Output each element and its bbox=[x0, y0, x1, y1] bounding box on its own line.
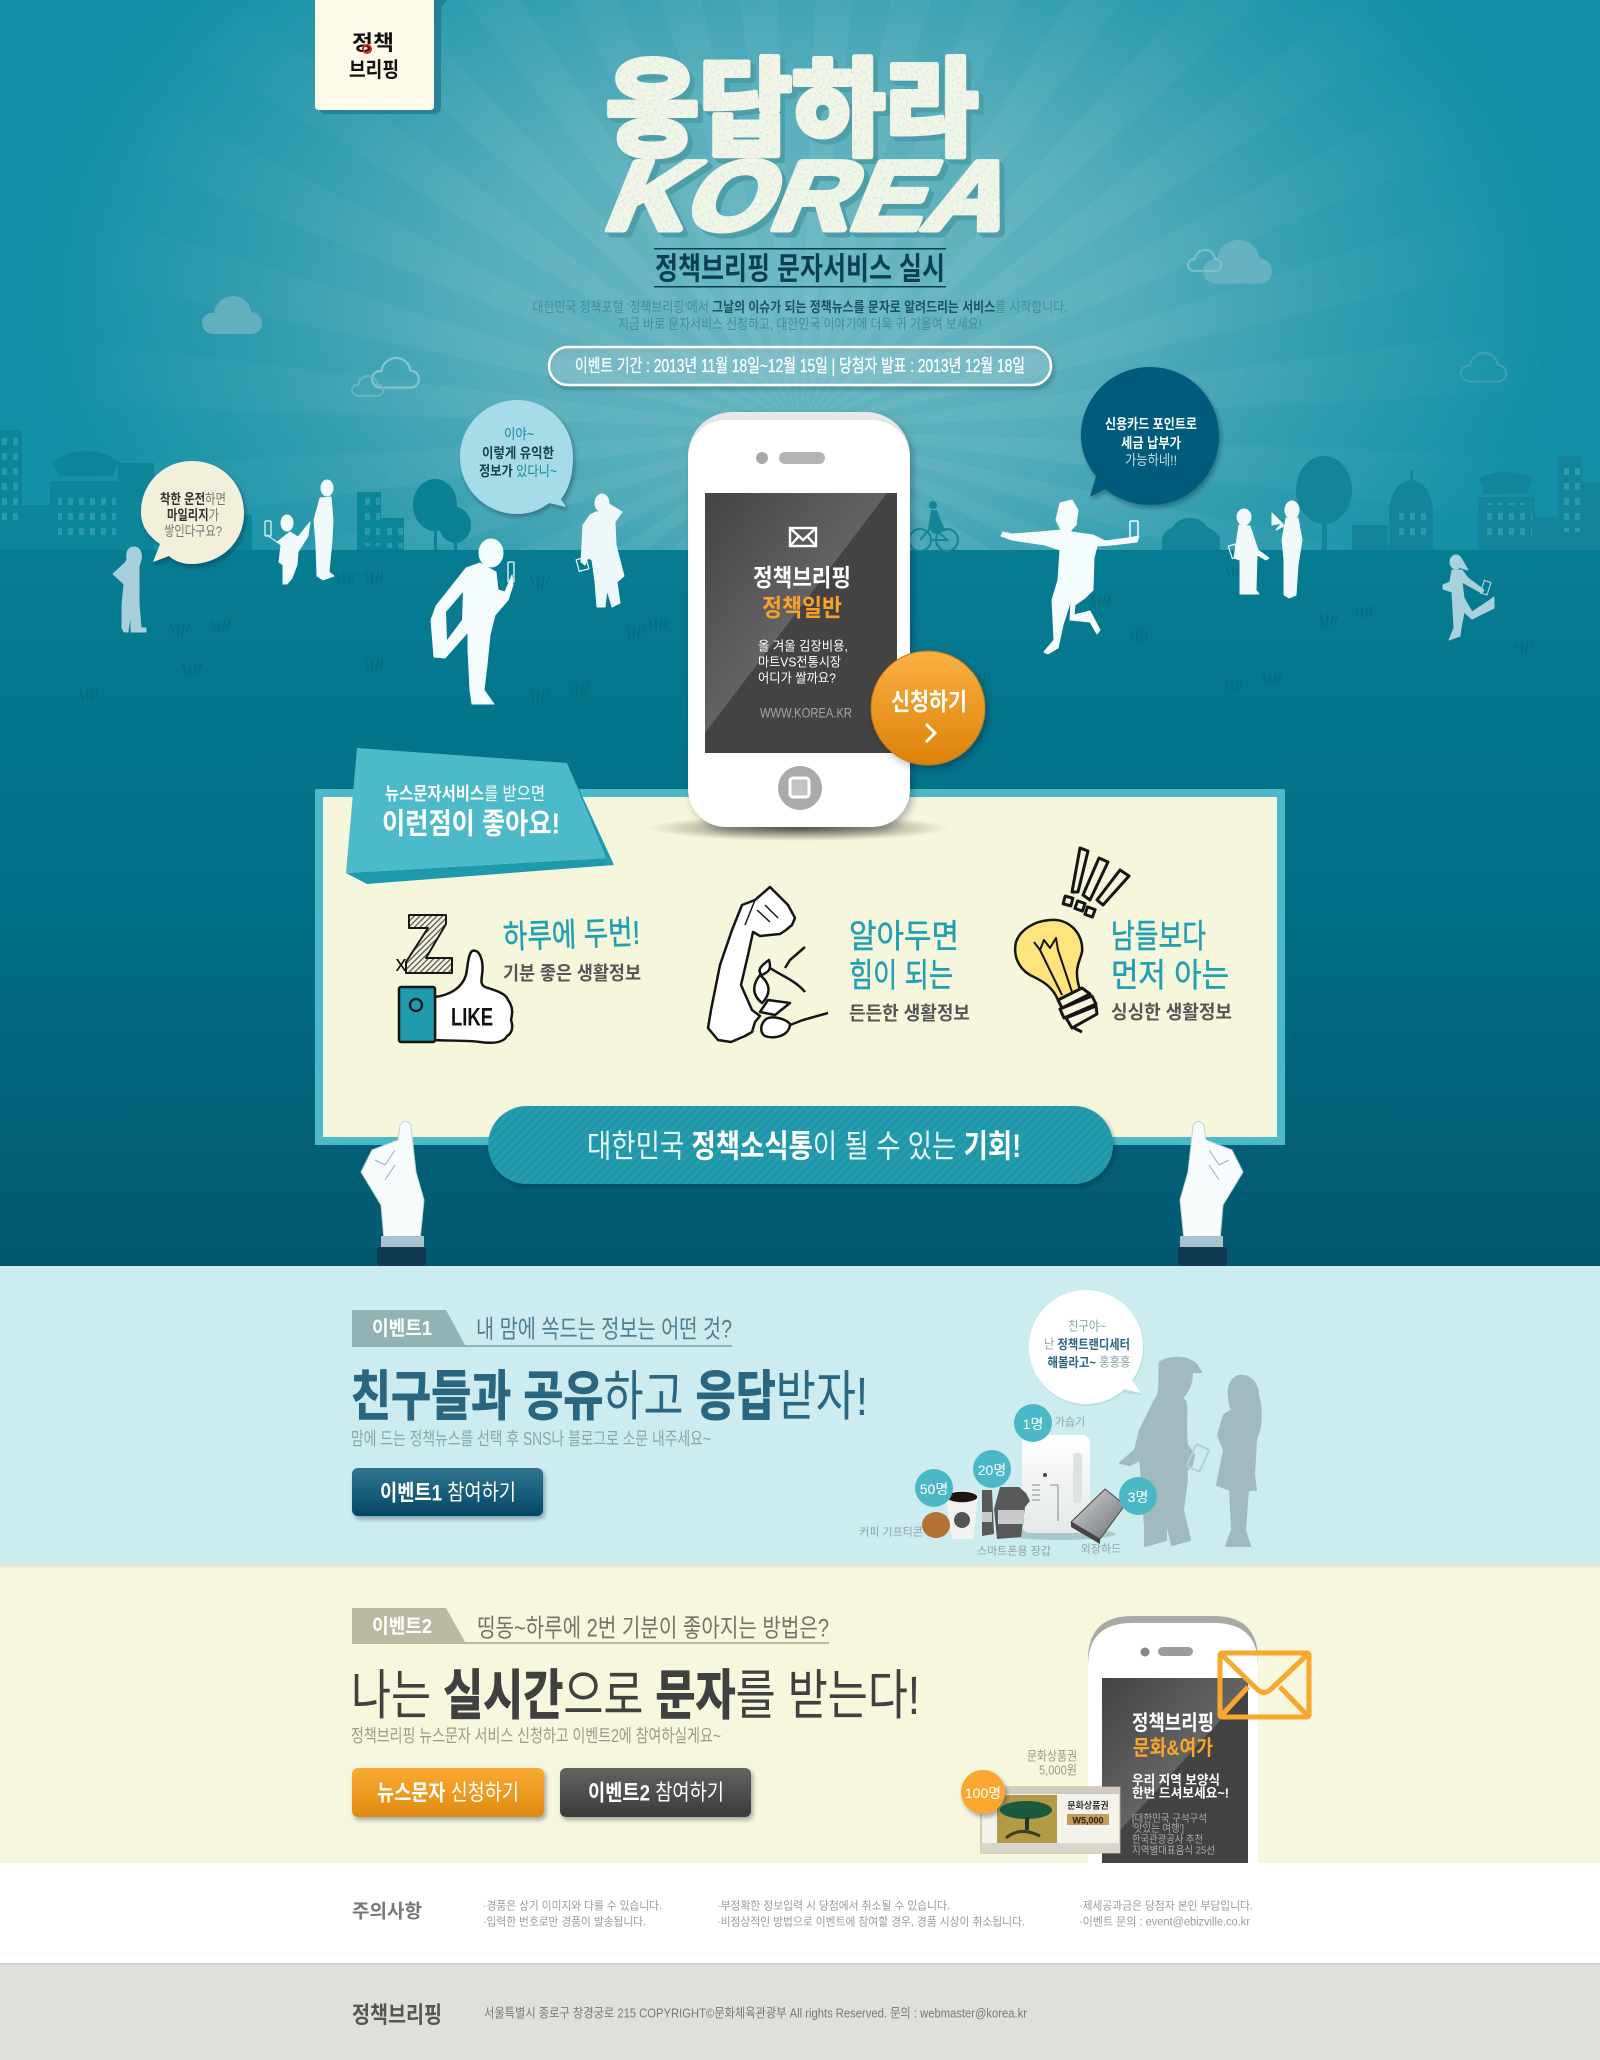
benefit 3 text: 남들보다 bbox=[1111, 917, 1206, 954]
prize: gift voucher: W5,000 bbox=[1072, 1816, 1104, 1826]
phone screen: 정책브리핑 bbox=[753, 565, 851, 592]
event 2 heading: 나는 실시간으로 문자를 받는다! bbox=[351, 1666, 920, 1726]
speech bubble: friend: 난 정책트랜디세터 bbox=[1044, 1336, 1130, 1351]
speech bubble: dark blue: 가능하네!! bbox=[1125, 452, 1177, 468]
event 1 tag: 내 맘에 쏙드는 정보는 어떤 것? bbox=[476, 1316, 732, 1344]
footer copyright: 서울특별시 종로구 창경궁로 215 COPYRIGHT©문화체육관광부 All rights Reserved. 문의 : webmaster@korea.kr bbox=[484, 2005, 1028, 2020]
phone screen: 올 겨울 김장비용, bbox=[758, 638, 848, 653]
footer logo: 정책브리핑 bbox=[352, 2001, 442, 2027]
event 1 button bbox=[352, 1468, 543, 1516]
event 1 button: 이벤트1 참여하기 bbox=[380, 1480, 516, 1505]
slogan pill bbox=[488, 1106, 1113, 1184]
prize labels bbox=[859, 1416, 1121, 1558]
logo card: 정책 bbox=[352, 32, 394, 55]
notice lines: ·이벤트 문의 : event@ebizville.co.kr bbox=[1079, 1916, 1250, 1929]
silhouette: big person right bbox=[1001, 500, 1139, 654]
speech bubble: light blue: 이야~ bbox=[504, 426, 534, 442]
subtitle: 정책브리핑 문자서비스 실시 bbox=[655, 251, 945, 286]
prize labels: 스마트폰용 장갑 bbox=[977, 1545, 1051, 1558]
event period pill: 이벤트 기간 : 2013년 11월 18일~12월 15일 | 당첨자 발표 : 2013년 12월 18일 bbox=[575, 356, 1025, 376]
speech bubble: cream: 착한 운전하면 bbox=[160, 491, 226, 507]
apply button: 신청하기 bbox=[891, 689, 967, 716]
silhouette: boy left bbox=[113, 547, 146, 632]
benefit 1 text: 하루에 두번! bbox=[502, 914, 641, 955]
phone screen: 마트VS전통시장 bbox=[758, 654, 841, 669]
clouds bbox=[202, 240, 1506, 396]
icon: light bulb and exclamation marks bbox=[1015, 848, 1129, 1032]
speech bubble: dark blue: 신용카드 포인트로 bbox=[1105, 416, 1197, 432]
phone 2: '맛있는 여행'] bbox=[1132, 1823, 1184, 1835]
benefit 1 text bbox=[502, 914, 641, 985]
prize labels: 커피 기프티콘 bbox=[859, 1526, 923, 1539]
silhouette: boy and girl bbox=[1120, 1358, 1261, 1546]
benefits tag: 뉴스문자서비스를 받으면 bbox=[385, 784, 545, 804]
button: event 2 join: 이벤트2 참여하기 bbox=[588, 1780, 724, 1805]
silhouette: man with tablet bbox=[576, 494, 624, 607]
icon: like thumb with Z: LIKE bbox=[451, 1004, 493, 1032]
prize label: gift card: 문화상품권 bbox=[1027, 1748, 1077, 1763]
speech bubble: dark blue: 세금 납부가 bbox=[1121, 435, 1181, 451]
logo card: 브리핑 bbox=[349, 59, 399, 82]
button: event 2 join bbox=[560, 1768, 751, 1817]
phone screen: WWW.KOREA.KR bbox=[760, 705, 852, 720]
speech bubble: light blue bbox=[460, 400, 573, 514]
icon: like thumb with Z bbox=[396, 915, 512, 1043]
phone screen bbox=[705, 493, 897, 753]
silhouette: couple right bbox=[1228, 501, 1302, 598]
notice lines: ·경품은 상기 이미지와 다를 수 있습니다. bbox=[483, 1899, 662, 1913]
panel: event 2 bbox=[0, 1565, 1600, 1863]
phone screen: 어디가 쌀까요? bbox=[758, 670, 836, 685]
speech bubble: cream: 마일리지가 bbox=[167, 507, 219, 523]
event 1 tag: 이벤트1 bbox=[372, 1317, 432, 1340]
city skyline left bbox=[0, 430, 471, 550]
event period pill bbox=[549, 347, 1051, 385]
prize count badges: 1명 bbox=[1023, 1416, 1043, 1432]
intro text bbox=[532, 299, 1068, 332]
phone 2: 지역별대표음식 25선 bbox=[1132, 1845, 1215, 1857]
benefit 2 text: 알아두면 bbox=[849, 917, 959, 954]
silhouette: running girl bbox=[1443, 555, 1494, 640]
benefit 2 text bbox=[849, 917, 970, 1025]
panel: notice bbox=[0, 1863, 1600, 1963]
silhouette: stretching person bbox=[431, 539, 514, 704]
benefit 3 text bbox=[1111, 917, 1232, 1024]
apply button bbox=[871, 651, 985, 765]
prize label: gift card: 5,000원 bbox=[1039, 1762, 1077, 1777]
benefits tag bbox=[346, 748, 614, 884]
phone 2: 문화&여가 bbox=[1133, 1737, 1213, 1760]
prize label: gift card bbox=[1027, 1748, 1077, 1777]
speech bubble: friend: 친구야~ bbox=[1068, 1318, 1106, 1333]
button: news subscribe: 뉴스문자 신청하기 bbox=[377, 1780, 519, 1805]
logo card bbox=[315, 0, 447, 114]
phone 2: 정책브리핑 bbox=[1132, 1712, 1214, 1735]
phone shadow bbox=[649, 815, 949, 841]
intro text: 지금 바로 문자서비스 신청하고, 대한민국 이야기에 더욱 귀 기울여 보세요! bbox=[618, 316, 982, 332]
speech bubble: friend bbox=[1029, 1290, 1144, 1406]
prize: humidifier bbox=[1005, 1435, 1115, 1540]
phone screen: 정책일반 bbox=[762, 595, 842, 622]
hero ground bbox=[0, 550, 1600, 1266]
button: news subscribe bbox=[352, 1768, 544, 1817]
phone 2: 한번 드셔보세요~! bbox=[1132, 1785, 1229, 1800]
event 2 description: 정책브리핑 뉴스문자 서비스 신청하고 이벤트2에 참여하실게요~ bbox=[351, 1726, 721, 1746]
prize count badges bbox=[915, 1404, 1157, 1515]
notice lines: ·부정확한 정보입력 시 당첨에서 취소될 수 있습니다. bbox=[717, 1899, 950, 1913]
speech bubble: cream: 쌓인다구요? bbox=[164, 523, 222, 539]
prize: coffee cup and muffin bbox=[922, 1491, 978, 1539]
prize: gift voucher: 100명 bbox=[965, 1785, 1001, 1801]
prize: external hard drive bbox=[1071, 1489, 1125, 1544]
title: KOREA bbox=[592, 141, 1035, 251]
main phone bbox=[688, 412, 910, 827]
notice lines: ·입력한 번호로만 경품이 발송됩니다. bbox=[483, 1915, 646, 1929]
benefit 2 text: 힘이 되는 bbox=[849, 956, 953, 993]
prize: gift voucher bbox=[961, 1770, 1120, 1853]
benefit 3 text: 먼저 아는 bbox=[1111, 956, 1229, 993]
hand right bbox=[1178, 1122, 1243, 1266]
home button bbox=[778, 766, 822, 810]
prize: gift voucher: 문화상품권 bbox=[1067, 1800, 1109, 1811]
event 2 tag: 이벤트2 bbox=[372, 1615, 432, 1638]
event 1 tag bbox=[352, 1310, 732, 1347]
prize count badges: 3명 bbox=[1128, 1489, 1148, 1505]
phone 2: 한국관광공사 추천 bbox=[1132, 1834, 1203, 1846]
footer bbox=[0, 1963, 1600, 2060]
icon: flexed arm bbox=[708, 887, 828, 1042]
intro text: 대한민국 정책포털 ‘정책브리핑’에서 그날의 이슈가 되는 정책뉴스를 문자로 알려드리는 서비스를 시작합니다. bbox=[532, 299, 1068, 315]
speech bubble: dark blue bbox=[1081, 367, 1219, 505]
speech bubble: light blue: 이렇게 유익한 bbox=[482, 445, 554, 461]
speech bubble: light blue: 정보가 있다니~ bbox=[479, 463, 557, 479]
benefit 1 text: 기분 좋은 생활정보 bbox=[503, 963, 641, 985]
benefit 2 text: 든든한 생활정보 bbox=[849, 1003, 970, 1025]
benefits tag: 이런점이 좋아요! bbox=[382, 808, 560, 841]
event 2 tag bbox=[352, 1608, 829, 1644]
city skyline right bbox=[909, 456, 1600, 551]
title bbox=[592, 51, 1035, 251]
speech bubble: cream bbox=[141, 461, 244, 564]
phone 2 bbox=[1088, 1616, 1258, 1863]
phone 2: [대한민국 구석구석 bbox=[1132, 1813, 1207, 1825]
hand left bbox=[361, 1122, 426, 1266]
prize count badges: 20명 bbox=[978, 1462, 1006, 1478]
benefits panel bbox=[319, 793, 1281, 1141]
phone 2: 우리 지역 보양식 bbox=[1132, 1772, 1220, 1787]
event 1 description: 맘에 드는 정책뉴스를 선택 후 SNS나 블로그로 소문 내주세요~ bbox=[351, 1429, 711, 1449]
silhouette: child and adult left bbox=[265, 480, 334, 584]
prize count badges: 50명 bbox=[920, 1481, 948, 1497]
prize labels: 외장하드 bbox=[1081, 1542, 1121, 1556]
prize labels: 가습기 bbox=[1055, 1416, 1085, 1429]
title: 응답하라 bbox=[606, 51, 978, 169]
notice lines bbox=[483, 1899, 1253, 1929]
event 1 heading: 친구들과 공유하고 응답받자! bbox=[351, 1367, 868, 1427]
event 2 tag: 띵동~하루에 2번 기분이 좋아지는 방법은? bbox=[477, 1614, 829, 1642]
grass tufts bbox=[80, 565, 1533, 703]
hero sun rays bbox=[404, 389, 1168, 550]
hero sky background bbox=[0, 0, 1600, 560]
icon: envelope bbox=[790, 528, 816, 546]
notice heading: 주의사항 bbox=[352, 1901, 422, 1923]
prize: gloves bbox=[982, 1487, 1030, 1539]
speech bubble: friend: 해볼라고~ 홍홍홍 bbox=[1048, 1354, 1131, 1369]
icon: like thumb with Z: x bbox=[396, 951, 406, 976]
icon: orange envelope bbox=[1220, 1653, 1309, 1717]
slogan pill: 대한민국 정책소식통이 될 수 있는 기회! bbox=[587, 1128, 1021, 1164]
benefit 3 text: 싱싱한 생활정보 bbox=[1111, 1002, 1232, 1024]
panel: event 1 bbox=[0, 1266, 1600, 1565]
notice lines: ·제세공과금은 당첨자 본인 부담입니다. bbox=[1079, 1900, 1253, 1913]
notice lines: ·비정상적인 방법으로 이벤트에 참여할 경우, 경품 시상이 취소됩니다. bbox=[717, 1915, 1025, 1929]
